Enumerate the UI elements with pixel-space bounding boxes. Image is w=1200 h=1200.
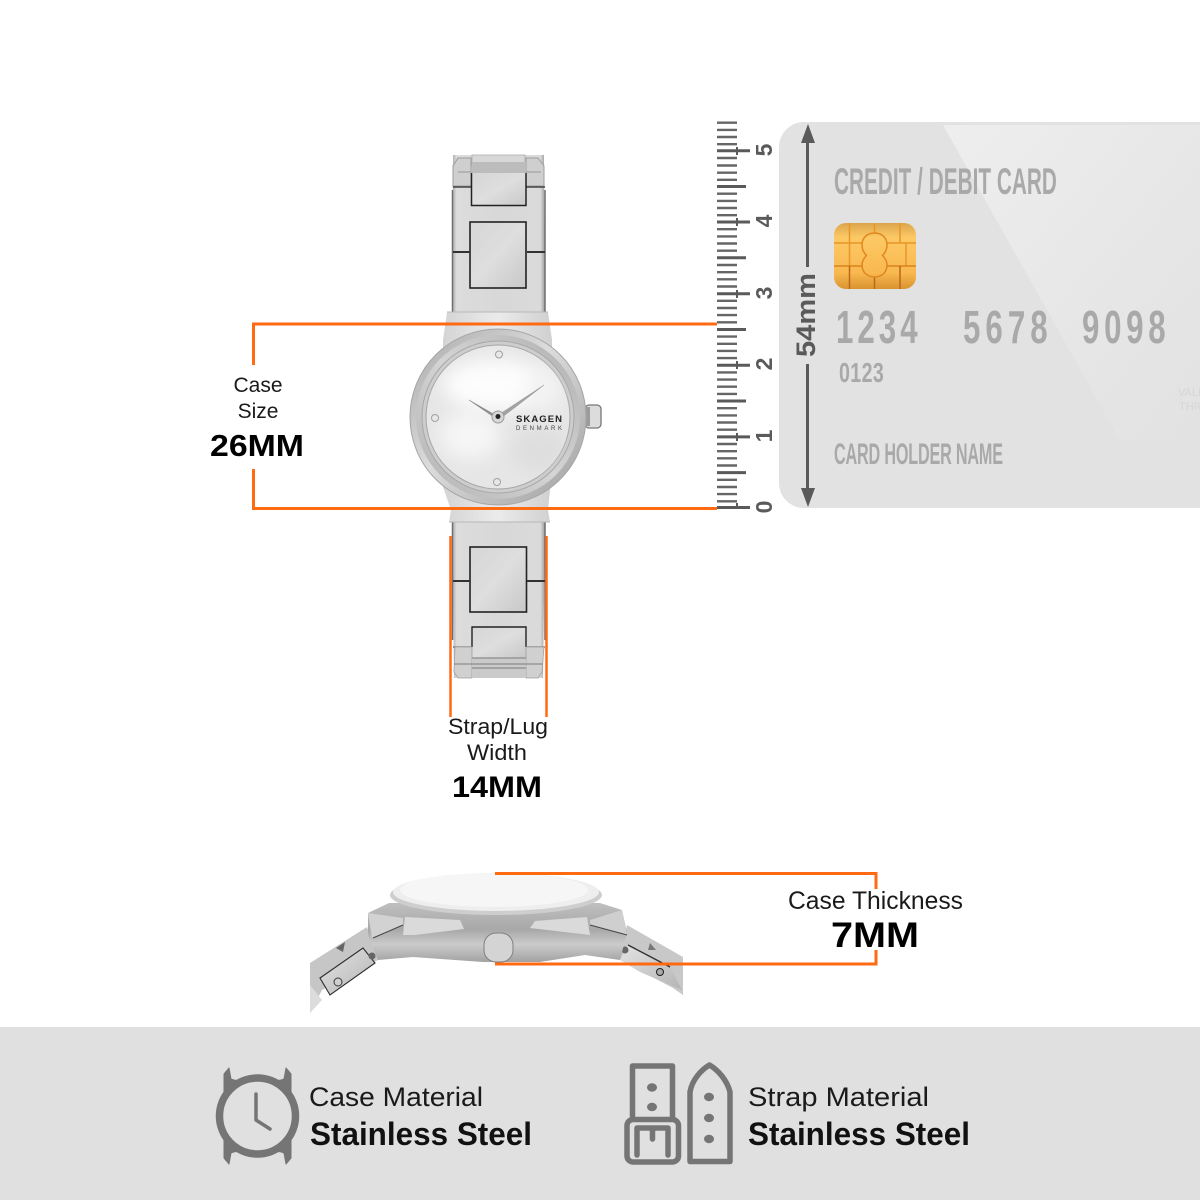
ruler numbers: 2 xyxy=(751,358,777,370)
dial xyxy=(426,345,570,489)
ruler numbers: 0 xyxy=(751,501,777,513)
strap material text: Stainless Steel xyxy=(748,1116,970,1152)
card code: 0123 xyxy=(839,358,884,389)
ruler xyxy=(717,123,777,513)
panel: materials footer xyxy=(0,1027,1200,1200)
card number xyxy=(836,302,1170,354)
strap material text: Strap Material xyxy=(748,1082,929,1112)
strap material text xyxy=(748,1082,970,1152)
ruler numbers: 3 xyxy=(751,287,777,299)
54mm label: 54mm xyxy=(791,273,821,357)
right bracelet xyxy=(620,925,683,995)
left bracelet xyxy=(310,927,378,1013)
logo: DENMARK xyxy=(516,426,562,432)
icon: watch case xyxy=(220,1068,296,1164)
case material text xyxy=(309,1082,532,1152)
card number: 5678 xyxy=(963,302,1053,354)
case highlights xyxy=(403,917,464,935)
icon: strap xyxy=(627,1065,730,1162)
case xyxy=(410,329,586,505)
crown xyxy=(585,405,601,428)
callout: strap width: Width xyxy=(467,740,527,765)
ruler numbers: 5 xyxy=(751,143,777,156)
lugs xyxy=(443,312,552,522)
logo xyxy=(516,414,562,432)
case material text: Case Material xyxy=(309,1082,483,1112)
ruler numbers: 1 xyxy=(751,429,777,442)
lower bracelet xyxy=(452,522,545,678)
callout: strap width: 14MM xyxy=(452,771,542,804)
arrow: 54mm card height xyxy=(791,124,821,507)
callout: case size: Case xyxy=(233,374,283,397)
case body xyxy=(368,903,627,962)
callout: case size: 26MM xyxy=(210,428,304,463)
indices xyxy=(432,351,502,486)
card number: 9098 xyxy=(1082,302,1170,354)
ruler numbers xyxy=(751,143,777,513)
callout: case thickness: 7MM xyxy=(831,916,919,955)
watch: front view xyxy=(410,155,601,678)
hands xyxy=(469,385,544,423)
ruler numbers: 4 xyxy=(751,214,777,227)
callout: case thickness xyxy=(495,874,963,964)
callout: case size xyxy=(210,324,717,508)
callout: strap width: Strap/Lug xyxy=(448,714,548,739)
crown xyxy=(484,933,513,962)
valid thru faint text xyxy=(1178,387,1200,413)
card holder name: CARD HOLDER NAME xyxy=(834,438,1003,471)
logo: SKAGEN xyxy=(516,414,562,425)
card number: 1234 xyxy=(836,302,922,354)
icon: card chip xyxy=(834,223,916,289)
bezel top xyxy=(390,875,602,915)
callout: case size: Size xyxy=(238,400,278,423)
callout: strap width xyxy=(448,536,548,804)
case material text: Stainless Steel xyxy=(310,1116,532,1152)
upper bracelet xyxy=(452,155,545,312)
card heading: CREDIT / DEBIT CARD xyxy=(834,162,1057,203)
callout: case thickness: Case Thickness xyxy=(788,887,963,915)
panel: credit card xyxy=(779,122,1200,508)
watch: side view xyxy=(310,873,683,1013)
